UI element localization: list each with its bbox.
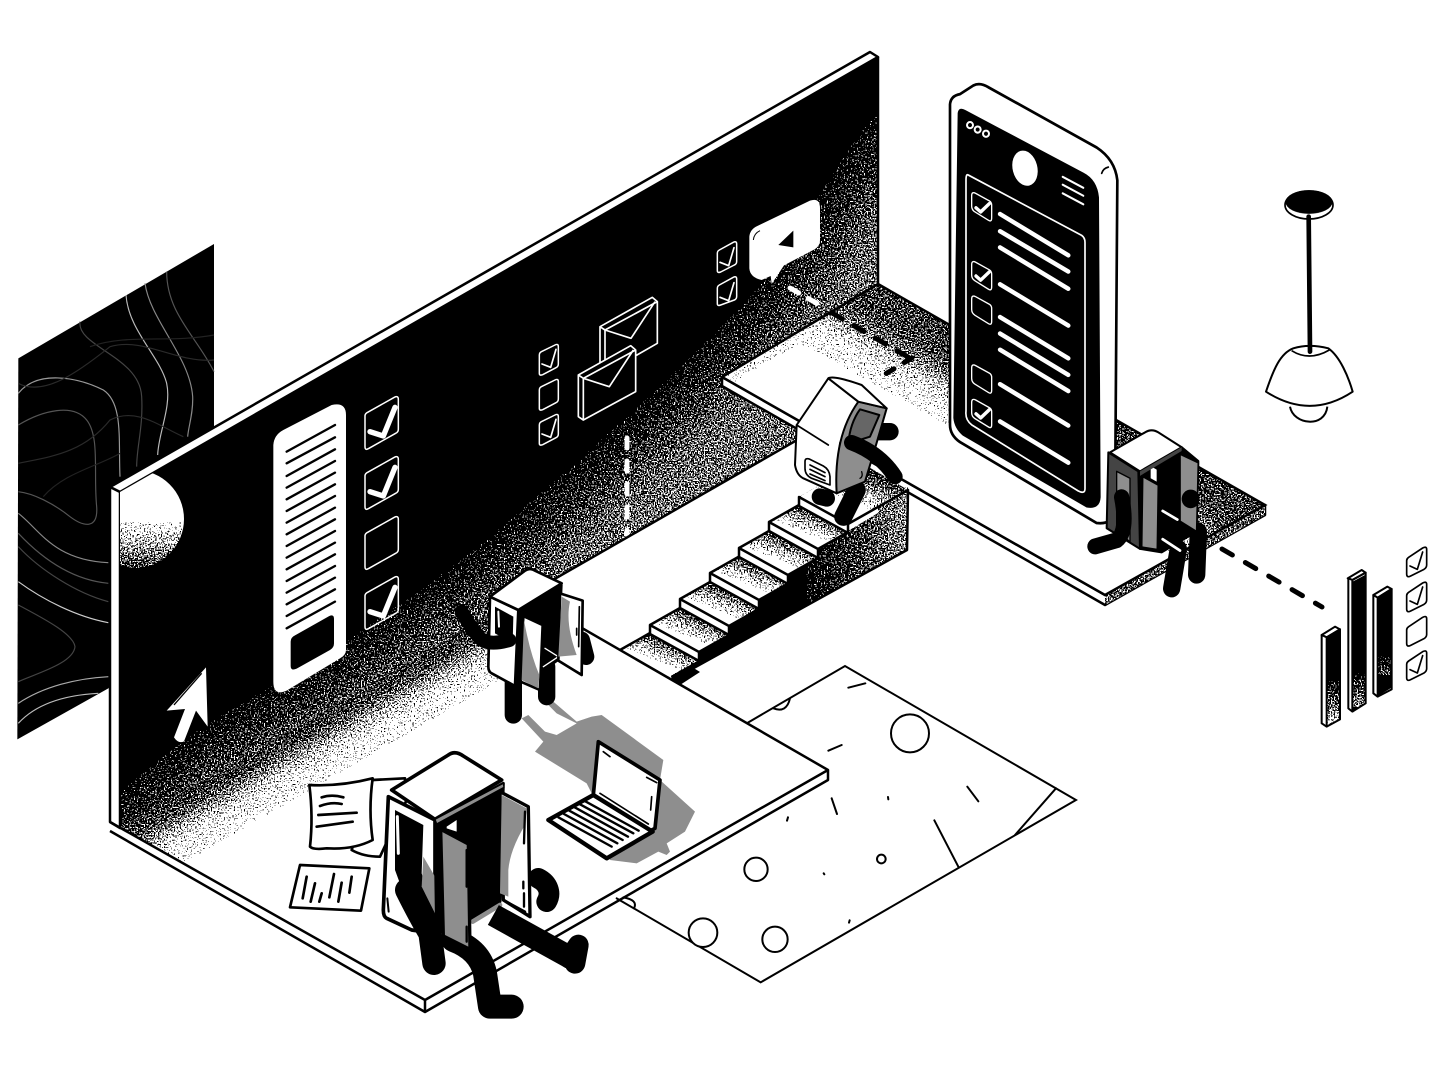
stair treads: [627, 468, 907, 677]
right door: [1180, 454, 1198, 532]
legs and back arm: [513, 667, 547, 715]
robot: waving cabinet: [462, 569, 586, 715]
robot: on stairs: [795, 377, 895, 517]
panel: dark contour map: [17, 244, 214, 739]
body side: [488, 597, 518, 686]
junction line wall to floor: [450, 440, 797, 639]
top: [828, 377, 887, 408]
checkboxes beside bars: [1407, 547, 1427, 680]
laptop: [548, 742, 660, 858]
front face: [836, 402, 887, 493]
moon on wall: [120, 473, 184, 568]
floor behind stairs: [120, 438, 910, 828]
dashed connector: wall to left robot: [588, 438, 627, 588]
shadow of robot: [522, 700, 695, 863]
dashed connector: robot to bars: [1222, 549, 1322, 607]
list card: [966, 175, 1085, 492]
legs: [1172, 532, 1198, 588]
platform stipple: [724, 286, 1262, 594]
panel: upper platform: [720, 283, 1268, 606]
platform thickness: [722, 377, 1265, 605]
panel: moon surface rug: [617, 666, 1076, 982]
header dots: [967, 122, 989, 137]
robot: front seated cabinet: [383, 753, 578, 1007]
body left side: [383, 797, 435, 933]
pendant lamp: [1266, 190, 1353, 422]
legs: [493, 915, 572, 958]
list checkboxes: [972, 193, 992, 428]
interior: [435, 783, 503, 933]
panel: lower floor: [109, 616, 830, 1014]
interior: [1140, 447, 1198, 552]
arm: [852, 443, 895, 477]
top: [392, 753, 502, 819]
floor edges: [110, 624, 828, 1012]
vent: [805, 459, 830, 485]
floor stipple: [110, 616, 498, 861]
bars shading: [1328, 575, 1391, 724]
robot: beside phone: [1095, 430, 1200, 588]
left door: [1142, 477, 1158, 550]
wall stipple face: [121, 59, 877, 827]
right door: [558, 593, 583, 675]
left door: [441, 829, 470, 949]
back arm: [538, 878, 549, 902]
top: [490, 569, 562, 610]
stair risers and outlines: [620, 490, 908, 680]
icon: message bubble: [749, 200, 820, 284]
menu lines: [1063, 177, 1083, 204]
back arm: [870, 406, 890, 458]
left door: [521, 616, 543, 690]
body side: [795, 378, 858, 493]
document card on wall: [273, 404, 346, 692]
arm: [462, 612, 509, 643]
list lines: [1000, 214, 1068, 463]
top: [1110, 430, 1182, 471]
body side: [1107, 452, 1140, 549]
stair side face: [670, 487, 908, 678]
avatar: [1009, 148, 1041, 189]
small checkboxes on wall: [539, 242, 737, 445]
right door: [500, 792, 530, 917]
legs: [820, 497, 827, 498]
interior: [517, 585, 562, 680]
wall top edge: [110, 52, 878, 492]
panel: back wall: [108, 50, 880, 830]
arm: [1095, 497, 1124, 546]
large checklist on wall: [365, 397, 398, 629]
icon: envelopes: [578, 297, 657, 420]
bar chart: [1320, 569, 1393, 728]
phone with checklist: [950, 84, 1117, 523]
wall front edge: [110, 487, 120, 828]
icon: cursor arrow: [167, 667, 208, 742]
papers: [290, 778, 407, 911]
dashed connector: bubble to phone: [790, 288, 912, 376]
staircase: [620, 468, 910, 680]
